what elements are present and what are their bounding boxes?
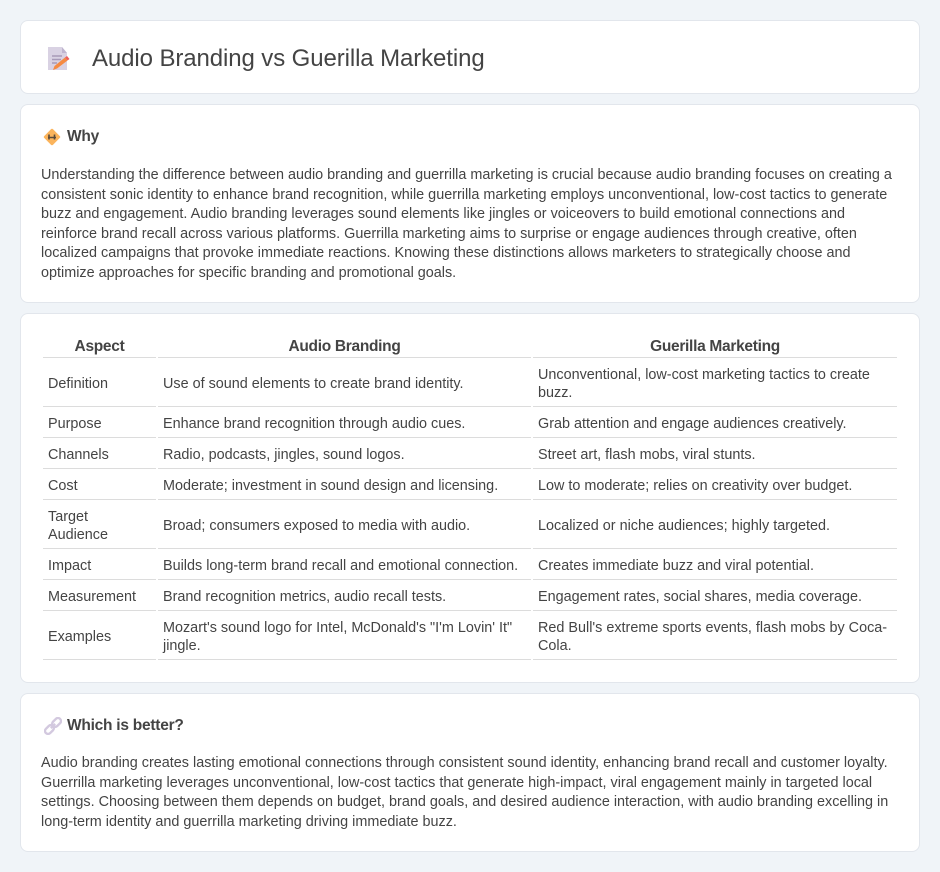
row: channels: Street art, flash mobs, viral stunts. bbox=[538, 447, 756, 463]
row: definition: buzz. bbox=[538, 385, 572, 401]
row: target audience: Audience bbox=[48, 527, 108, 543]
row: cost: Cost bbox=[48, 478, 78, 494]
text block: why: reinforce brand recall across various platforms. Guerrilla marketing aims to surprise or engage audiences through creative, often bbox=[41, 226, 857, 242]
row: definition: Unconventional, low-cost marketing tactics to create bbox=[538, 367, 870, 383]
row: examples: Examples bbox=[48, 629, 111, 645]
row: examples: Cola. bbox=[538, 638, 572, 654]
row: impact: Builds long-term brand recall and emotional connection. bbox=[163, 558, 518, 574]
panel: which is better bbox=[20, 693, 920, 852]
row: purpose: Enhance brand recognition through audio cues. bbox=[163, 416, 465, 432]
icon: chain link bbox=[44, 717, 62, 735]
row: definition: Use of sound elements to create brand identity. bbox=[163, 376, 464, 392]
row: measurement: Measurement bbox=[48, 589, 136, 605]
row: purpose: Purpose bbox=[48, 416, 102, 432]
row: impact bbox=[48, 558, 814, 574]
table header: Aspect bbox=[75, 338, 124, 355]
row: target audience: Localized or niche audiences; highly targeted. bbox=[538, 518, 830, 534]
text block: which is better bbox=[41, 755, 888, 830]
icon: warning diamond bbox=[44, 128, 60, 146]
text block: which is better: settings. Choosing between them depends on budget, brand goals, and desired audience interaction, with audio branding excelling in bbox=[41, 794, 888, 810]
heading: which is better: Which is better? bbox=[67, 717, 184, 734]
text block: why: consistent sonic identity to enhance brand recognition, while guerrilla marketing employs unconventional, low-cost tactics to generate bbox=[41, 187, 887, 203]
row: measurement: Brand recognition metrics, audio recall tests. bbox=[163, 589, 446, 605]
text block: why bbox=[41, 167, 892, 281]
row: impact: Impact bbox=[48, 558, 91, 574]
text block: why: Understanding the difference between audio branding and guerrilla marketing is crucial because audio branding focuses on creating a bbox=[41, 167, 892, 183]
panel: comparison table bbox=[20, 313, 920, 683]
row: channels: Radio, podcasts, jingles, sound logos. bbox=[163, 447, 405, 463]
text block: why: localized campaigns that provoke immediate reactions. Knowing these distinctions allows marketers to strategically choose and bbox=[41, 245, 850, 261]
row: target audience: Target bbox=[48, 509, 88, 525]
panel: why bbox=[20, 104, 920, 303]
row: examples bbox=[48, 620, 887, 654]
text block: why: buzz and engagement. Audio branding leverages sound elements like jingles or voiceovers to build emotional connections and bbox=[41, 206, 845, 222]
row: examples: Mozart's sound logo for Intel, McDonald's "I'm Lovin' It" bbox=[163, 620, 512, 636]
table header bbox=[74, 338, 780, 355]
row: channels: Channels bbox=[48, 447, 109, 463]
row: purpose bbox=[48, 416, 847, 432]
row: measurement: Engagement rates, social shares, media coverage. bbox=[538, 589, 862, 605]
text block: which is better: Guerrilla marketing leverages unconventional, low-cost tactics that generate high-impact, viral engagement mainly in targeted local bbox=[41, 775, 872, 791]
panel: header bbox=[20, 20, 920, 94]
icon: document with pencil bbox=[48, 47, 70, 70]
row: definition bbox=[48, 367, 870, 401]
row: measurement bbox=[48, 589, 862, 605]
row: impact: Creates immediate buzz and viral potential. bbox=[538, 558, 814, 574]
row: target audience bbox=[48, 509, 830, 543]
heading: why: Why bbox=[67, 128, 99, 145]
row: examples: Red Bull's extreme sports events, flash mobs by Coca- bbox=[538, 620, 887, 636]
row: cost: Low to moderate; relies on creativity over budget. bbox=[538, 478, 852, 494]
table header: Guerilla Marketing bbox=[650, 338, 780, 355]
row: purpose: Grab attention and engage audiences creatively. bbox=[538, 416, 847, 432]
title: Audio Branding vs Guerilla Marketing bbox=[92, 45, 485, 72]
row: target audience: Broad; consumers exposed to media with audio. bbox=[163, 518, 470, 534]
text block: which is better: long-term identity and guerrilla marketing driving immediate buzz. bbox=[41, 814, 457, 830]
row: channels bbox=[48, 447, 756, 463]
text block: which is better: Audio branding creates lasting emotional connections through consistent sound identity, enhancing brand recall and customer loyalty. bbox=[41, 755, 888, 771]
row: cost: Moderate; investment in sound design and licensing. bbox=[163, 478, 498, 494]
row: cost bbox=[48, 478, 852, 494]
table header: Audio Branding bbox=[288, 338, 401, 355]
row: examples: jingle. bbox=[163, 638, 201, 654]
text block: why: optimize approaches for specific branding and promotional goals. bbox=[41, 265, 456, 281]
row: definition: Definition bbox=[48, 376, 108, 392]
